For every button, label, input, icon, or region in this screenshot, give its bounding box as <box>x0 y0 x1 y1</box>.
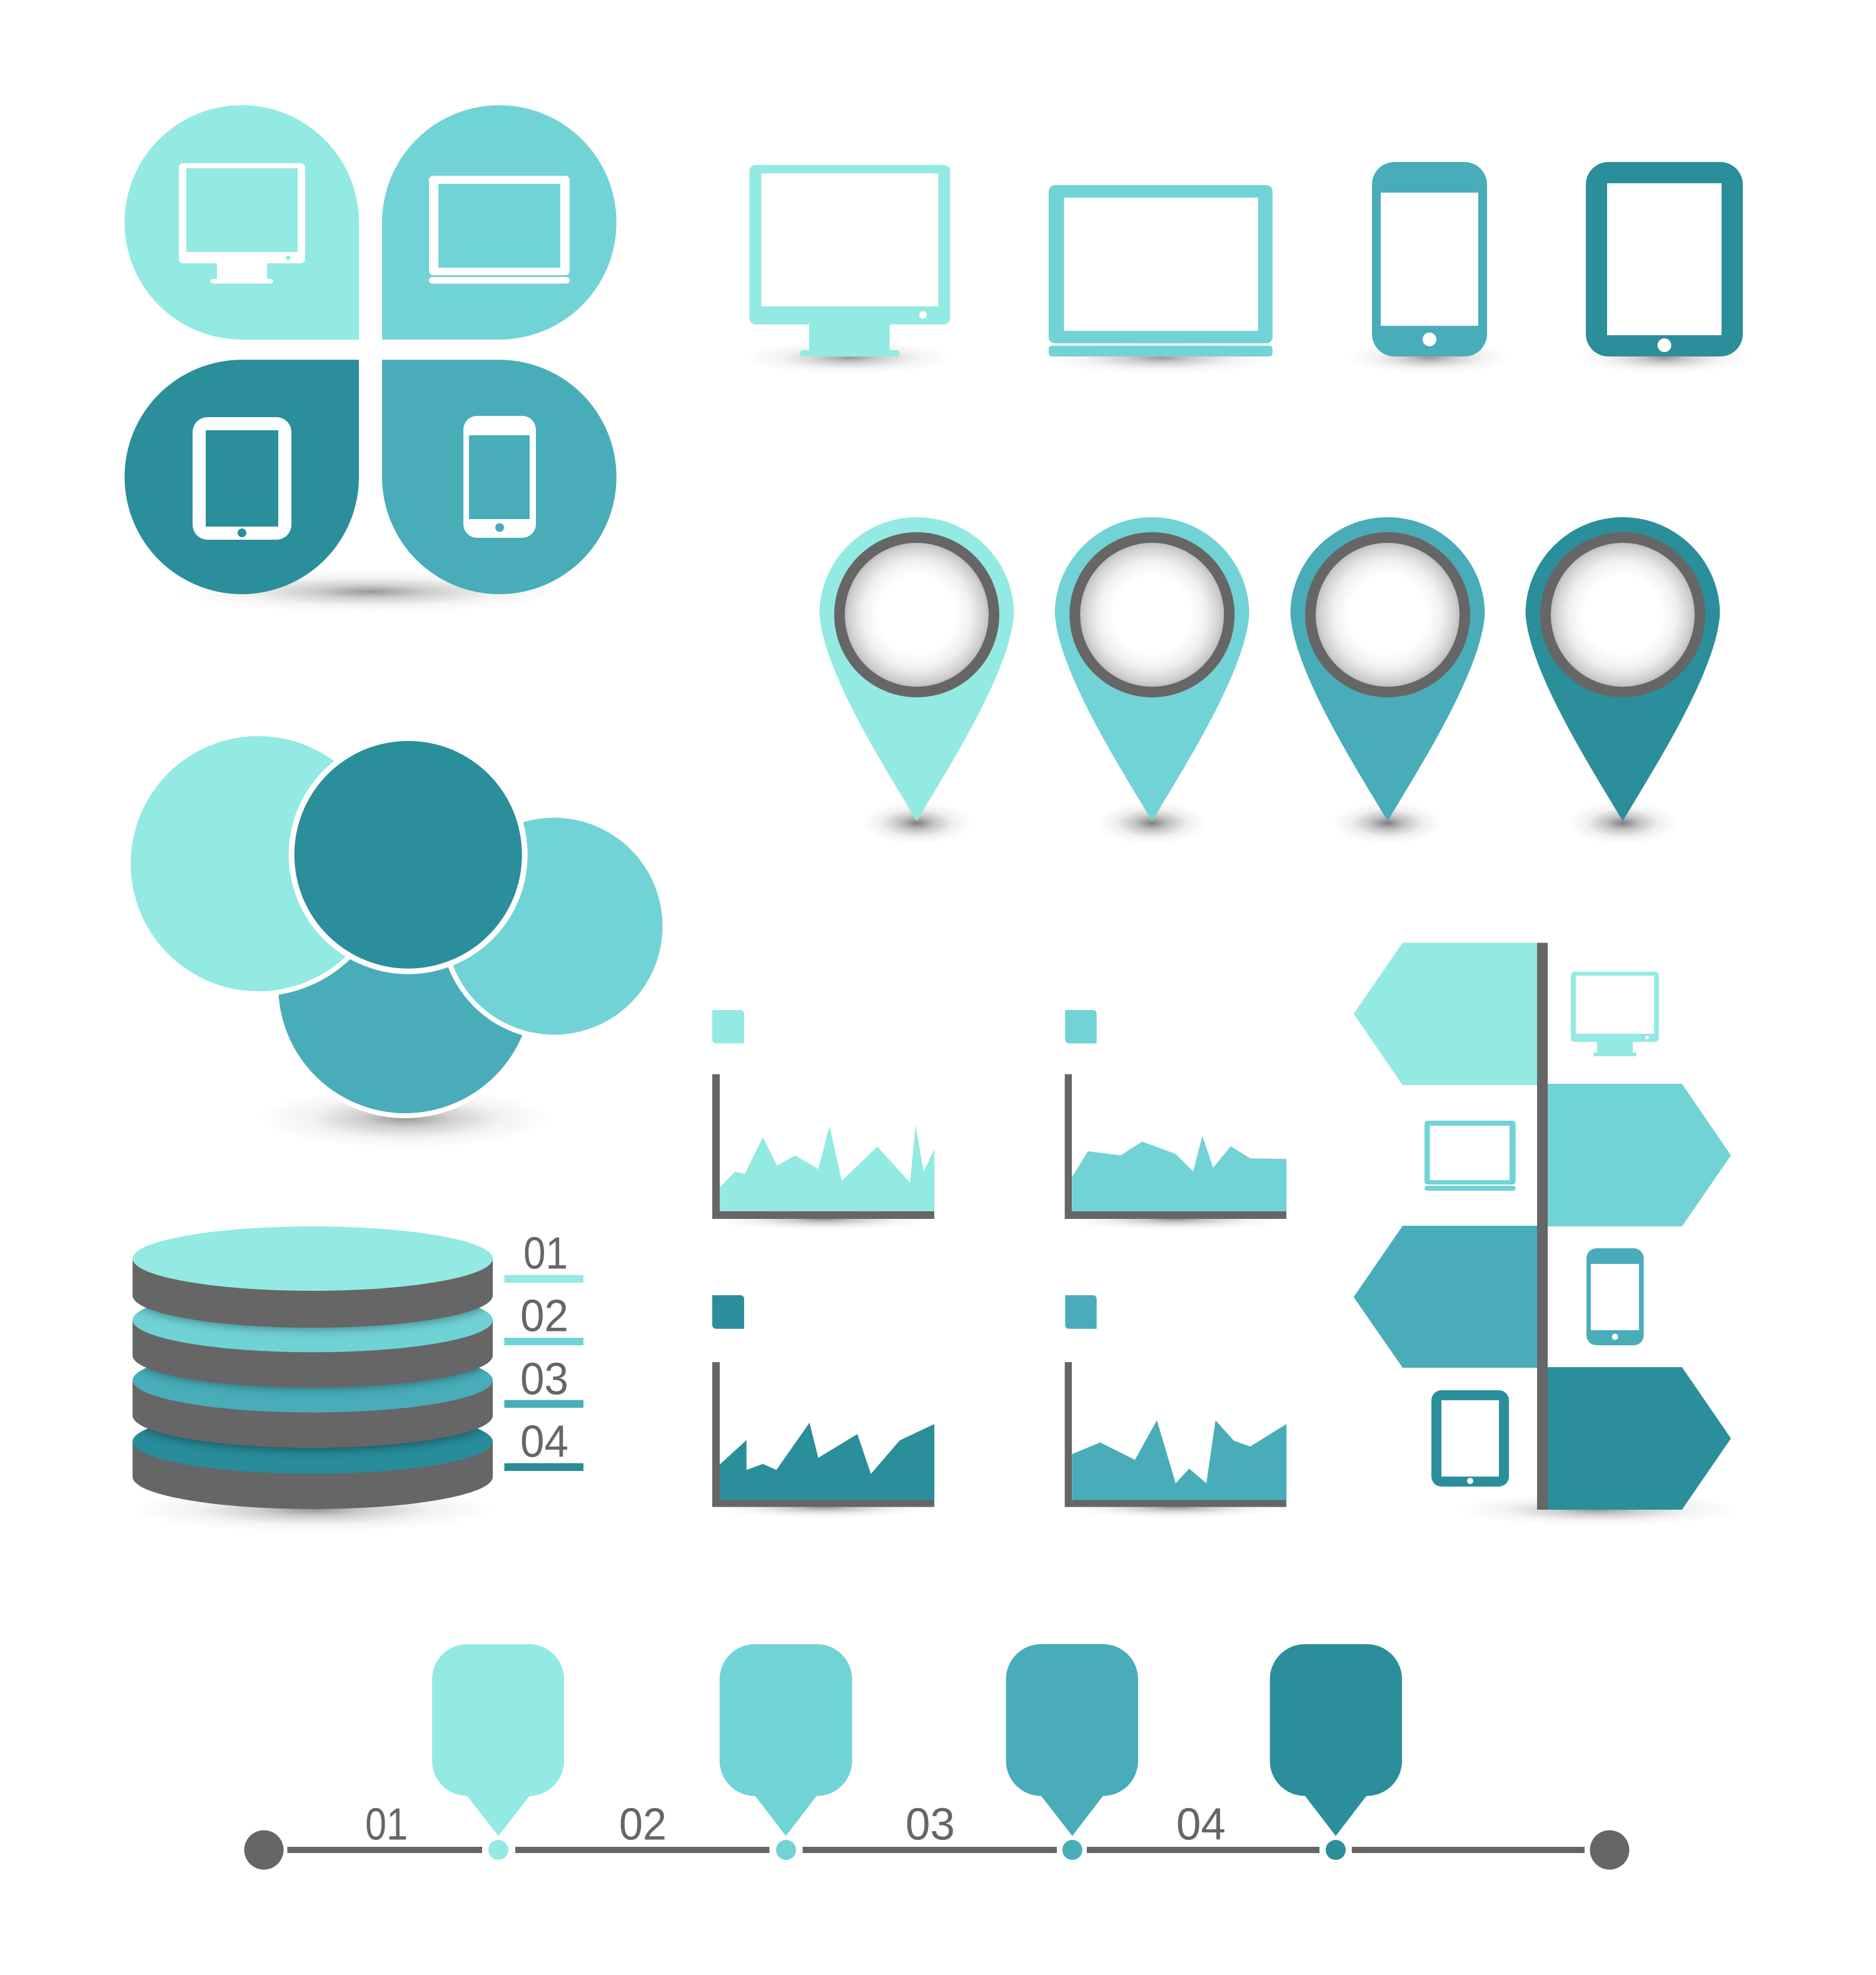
timeline label 04: 04 <box>1176 1800 1226 1850</box>
circles shadow <box>258 1088 552 1148</box>
callout bubble 2 <box>720 1644 852 1860</box>
circle: dark teal <box>295 741 522 969</box>
panel: signpost arrows <box>1354 943 1738 1526</box>
arrow 1 <box>1354 943 1538 1085</box>
circle: dark-mid teal <box>278 859 532 1113</box>
stack label 01: 01 <box>523 1228 568 1278</box>
disc 4 <box>133 1428 493 1509</box>
arrow 3 <box>1354 1226 1538 1368</box>
icon: small tablet <box>1431 1390 1509 1487</box>
petal: monitor <box>124 105 359 340</box>
map pin 1 <box>819 517 1014 844</box>
callout bubble 3 <box>1006 1644 1138 1860</box>
icon: small monitor <box>1571 972 1659 1056</box>
icon: small laptop <box>1425 1121 1516 1191</box>
panel: overlapping circles <box>131 736 663 1148</box>
signpost shadow <box>1457 1493 1738 1526</box>
chart 4 <box>1064 1295 1287 1518</box>
panel: map pins <box>819 517 1720 844</box>
disc 3 <box>133 1368 493 1448</box>
panel: stacked discs <box>132 1226 583 1532</box>
icon: monitor <box>746 165 952 374</box>
arrow 4 <box>1547 1367 1731 1510</box>
signpost pole <box>1537 943 1548 1510</box>
petal: phone <box>382 360 617 594</box>
panel: timeline <box>244 1644 1630 1870</box>
icon: laptop <box>1048 185 1273 374</box>
timeline label 03: 03 <box>905 1800 955 1850</box>
callout bubble 4 <box>1270 1644 1402 1860</box>
panel: device icons row <box>746 162 1748 374</box>
circle: medium aqua <box>445 818 663 1034</box>
petal cluster shadow <box>176 570 564 613</box>
callout bubble 1 <box>432 1644 564 1860</box>
map pin 2 <box>1055 517 1249 844</box>
stack shadow <box>132 1487 495 1532</box>
icon: phone <box>1348 162 1511 374</box>
timeline label 01: 01 <box>365 1800 408 1850</box>
panel: four-petal device cluster <box>124 105 617 613</box>
panel: area charts <box>712 1010 1287 1518</box>
timeline end dot <box>1590 1830 1630 1870</box>
chart 1 <box>712 1010 935 1230</box>
stack label 03 <box>504 1355 583 1408</box>
disc 2 <box>133 1308 493 1388</box>
stack label 03: 03 <box>520 1355 568 1405</box>
petal: tablet <box>124 360 359 594</box>
stack label 04 <box>504 1417 583 1471</box>
stack label 04: 04 <box>520 1417 568 1467</box>
stack label 02 <box>504 1291 583 1345</box>
chart 3 <box>712 1295 935 1518</box>
arrow 2 <box>1547 1084 1731 1226</box>
disc 1 <box>133 1226 493 1328</box>
stack label 01 <box>504 1228 583 1283</box>
circle: light aqua <box>131 736 386 991</box>
petal: laptop <box>382 105 617 340</box>
map pin 3 <box>1291 517 1485 844</box>
icon: small phone <box>1586 1248 1644 1345</box>
map pin 4 <box>1526 517 1720 844</box>
chart 2 <box>1064 1010 1287 1230</box>
timeline line segments <box>288 1847 1585 1853</box>
timeline start dot <box>244 1830 284 1870</box>
timeline label 02: 02 <box>619 1800 667 1850</box>
icon: tablet <box>1580 162 1748 374</box>
stack label 02: 02 <box>520 1291 568 1341</box>
